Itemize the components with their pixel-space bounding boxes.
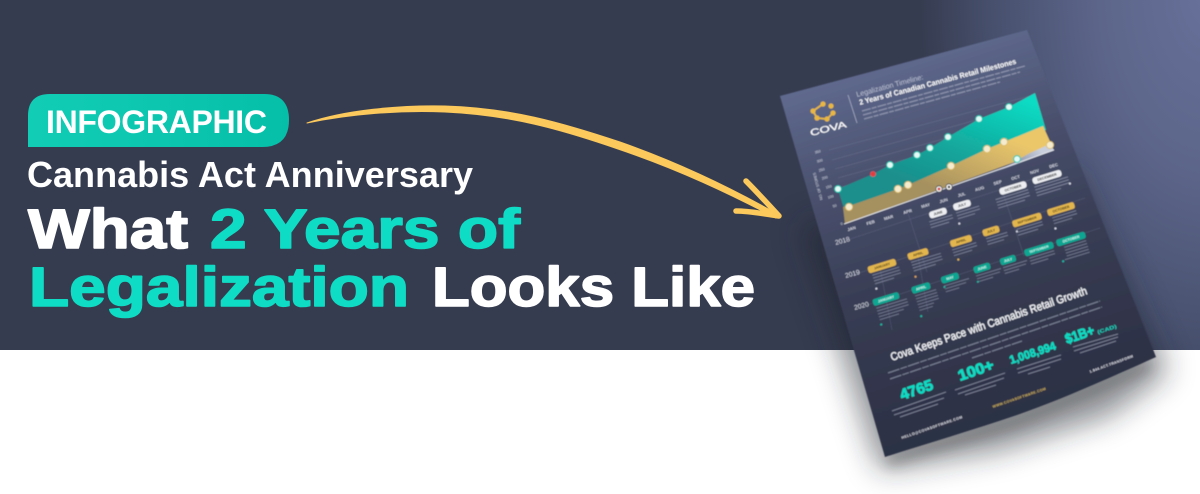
y axis labels: 100 [827,194,834,200]
arrow [307,106,779,218]
2018 milestones: OCTOBER [1004,184,1022,193]
month labels: MAY [921,202,931,209]
month labels [847,162,1059,232]
background band [0,0,1200,350]
teal series area [838,93,1046,212]
header description lines [862,66,1025,119]
2020 milestones: APRIL [915,284,927,292]
2019 milestones: APRIL [955,237,967,245]
month labels: OCT [1011,174,1021,181]
y axis labels: 50 [832,204,837,209]
month labels: AUG [974,185,985,192]
stat: 1,008,994: 1,008,994 [1008,340,1058,367]
2019 milestones: OCTOBER [1052,205,1070,214]
2020 milestones: JANUARY [877,295,895,304]
2018 milestones: JULY [957,202,967,208]
grey series area [962,144,1054,185]
month labels: SEP [993,179,1002,186]
timeline year labels: 2020 [853,301,870,312]
month labels: FEB [866,219,875,226]
stat: stores [892,377,946,417]
2019 milestones [867,202,1080,290]
2018 milestones [926,167,1072,228]
stat: 100+: 100+ [956,357,997,385]
stat: $1B+ CAD [1063,322,1118,353]
header title: Legalization Timeline: [855,72,924,99]
footer email: HELLO@COVASOFTWARE.COM [901,415,963,440]
2019 milestones: JULY [986,228,996,234]
2019 milestones: APRIL [912,250,924,258]
stat: 100+ [955,357,1005,395]
area chart [838,93,1054,224]
month labels: MAR [883,214,894,221]
2018 milestones: DECEMBER [1037,172,1058,182]
month labels: JUN [939,197,948,204]
2020 milestones: JULY [1003,257,1013,263]
month labels: JUL [957,191,966,198]
chart gridlines [829,96,1052,206]
paper shadow [798,170,1168,470]
y axis labels: 250 [818,167,825,173]
month labels: DEC [1049,162,1059,169]
timeline year labels: 2018 [834,236,851,247]
footer phone: 1.844.ACT.TRANSFORM [1089,354,1134,374]
header divider [848,95,857,123]
retail growth description lines [888,301,1102,379]
chart markers [835,104,1054,211]
infographic pill badge: INFOGRAPHIC [46,104,267,140]
2019 milestones: SEPTEMBER [1017,215,1038,225]
retail growth heading: Cova Keeps Pace with Cannabis Retail Growth [889,285,1089,364]
2018 milestones: JUNE [933,210,944,216]
stat: $1B+ CAD: $1B+ [1063,322,1096,347]
y axis labels [812,149,843,226]
stat: stores: 4765 [898,377,935,404]
logo: COVA [809,119,847,138]
footer website: WWW.COVASOFTWARE.COM [992,387,1046,409]
subtitle: Cannabis Act Anniversary [27,154,473,195]
headline: What [28,197,188,260]
timeline year labels [834,236,870,312]
y axis labels: 0 [840,222,843,226]
header title: 2 Years of Canadian Cannabis Retail Milestones [858,57,1017,107]
month labels: APR [903,208,913,215]
headline: 2 Years of [210,197,520,260]
stat: $1B+ CAD: (CAD) [1097,324,1118,336]
y axis labels: 300 [816,158,823,164]
headline: Looks Like [432,255,755,318]
timeline guide lines [838,170,1100,330]
2020 milestones: JUNE [977,265,988,271]
logo [809,101,847,138]
y axis labels: 150 [825,184,832,190]
2019 milestones: JANUARY [873,262,891,271]
month labels: NOV [1029,168,1040,175]
headline [28,197,755,318]
y axis labels: 350 [814,149,821,155]
y axis labels: 200 [821,175,828,181]
baseline [844,150,1054,224]
infographic pill badge [28,94,289,147]
infographic paper mockup [780,30,1156,457]
month labels: JAN [847,225,856,232]
2020 milestones: SEPTEMBER [1029,244,1050,254]
2020 milestones: MAY [946,275,955,281]
timeline year labels: 2019 [844,269,861,280]
y axis labels: NO. OF STORES [812,172,824,200]
2020 milestones [872,231,1091,326]
2020 milestones: OCTOBER [1062,235,1080,244]
gold series area [843,126,1053,224]
headline: Legalization [29,255,409,318]
